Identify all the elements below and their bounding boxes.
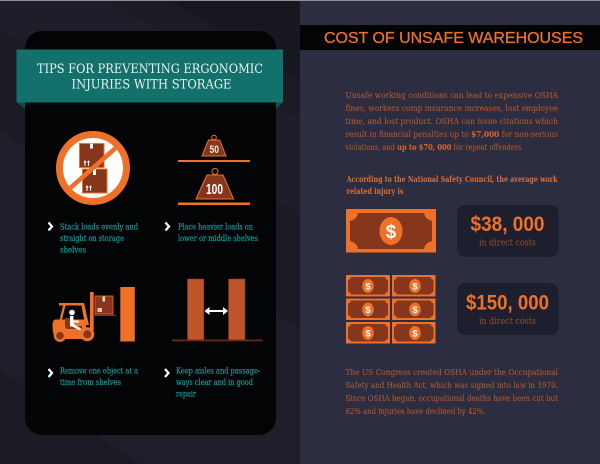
tip: heavier loads: lower or middle shelves <box>178 233 258 243</box>
icon: six dollar bills: $ <box>365 282 371 292</box>
stat: $150,000: $150, 000 <box>466 292 549 314</box>
tip: heavier loads: Place heavier loads on <box>178 222 254 232</box>
text block: OSHA fines: Unsafe working conditions can lead to expensive OSHA <box>346 91 559 101</box>
stat: $38,000: in direct costs <box>479 238 536 248</box>
tip: keep aisles clear: repair <box>176 388 196 398</box>
tip: keep aisles clear <box>165 366 260 398</box>
text block: OSHA history: Safety and Health Act, which was signed into law in 1970. <box>346 381 558 391</box>
icon: weights on shelves: 50 <box>210 144 219 156</box>
icon: six dollar bills: $ <box>412 282 418 292</box>
tip: remove one object: time from shelves <box>60 377 121 387</box>
icon: forklift <box>52 287 135 342</box>
icon: clear aisle <box>172 279 262 341</box>
text block: national safety council: related injury is <box>346 187 404 197</box>
text block: OSHA fines: result in financial penalties up to $7,000 for non-serious <box>346 130 558 140</box>
tip: remove one object: Remove one object at a <box>60 366 138 376</box>
icon: six dollar bills: $ <box>365 305 371 316</box>
heading: cost of unsafe warehouses: COST OF UNSAFE WAREHOUSES <box>324 30 583 47</box>
icon: six dollar bills: $ <box>412 328 418 340</box>
stat: $38,000 <box>457 205 558 257</box>
stat: $150,000 <box>457 283 558 335</box>
stat: $150,000: in direct costs <box>479 316 536 327</box>
heading banner <box>16 50 283 109</box>
tip: stack loads: shelves <box>60 244 86 254</box>
tip: stack loads: Stack loads evenly and <box>60 222 138 232</box>
text block: OSHA history: 62% and injuries have declined by 42%. <box>346 407 486 417</box>
text block: OSHA fines: time, and lost product. OSHA can issue citations which <box>346 117 558 127</box>
icon: six dollar bills <box>346 275 436 344</box>
text block: OSHA fines: fines, workers comp insurance increases, lost employee <box>346 104 558 114</box>
tip: heavier loads <box>166 222 258 243</box>
icon: weights on shelves: 100 <box>206 182 223 198</box>
icon: single dollar bill <box>346 209 436 252</box>
text block: national safety council <box>346 175 558 197</box>
panel: tips for preventing injuries <box>16 31 283 435</box>
tip: stack loads: straight on storage <box>60 233 124 243</box>
icon: six dollar bills: $ <box>412 305 418 316</box>
text block: OSHA history: The US Congress created OSHA under the Occupational <box>346 368 558 378</box>
tip: keep aisles clear: ways clear and in good <box>176 377 253 387</box>
icon: single dollar bill: $ <box>386 222 397 243</box>
text block: OSHA fines: violations, and up to $70, 000 for repeat offenders. <box>345 143 524 153</box>
heading: cost of unsafe warehouses <box>300 25 600 50</box>
tip: stack loads <box>48 222 138 254</box>
icon: six dollar bills: $ <box>365 328 371 340</box>
heading banner: TIPS FOR PREVENTING ERGONOMIC <box>37 62 263 77</box>
text block: OSHA history: Since OSHA began, occupational deaths have been cut but <box>346 394 558 404</box>
text block: OSHA history <box>346 368 558 417</box>
text block: OSHA fines <box>345 91 559 153</box>
stat: $38,000: $38, 000 <box>470 213 544 236</box>
icon: no stacked boxes <box>60 134 126 202</box>
tip: remove one object <box>48 366 138 387</box>
heading banner: INJURIES WITH STORAGE <box>72 78 232 92</box>
icon: weights on shelves <box>178 135 250 205</box>
tip: keep aisles clear: Keep aisles and passage- <box>176 366 260 376</box>
